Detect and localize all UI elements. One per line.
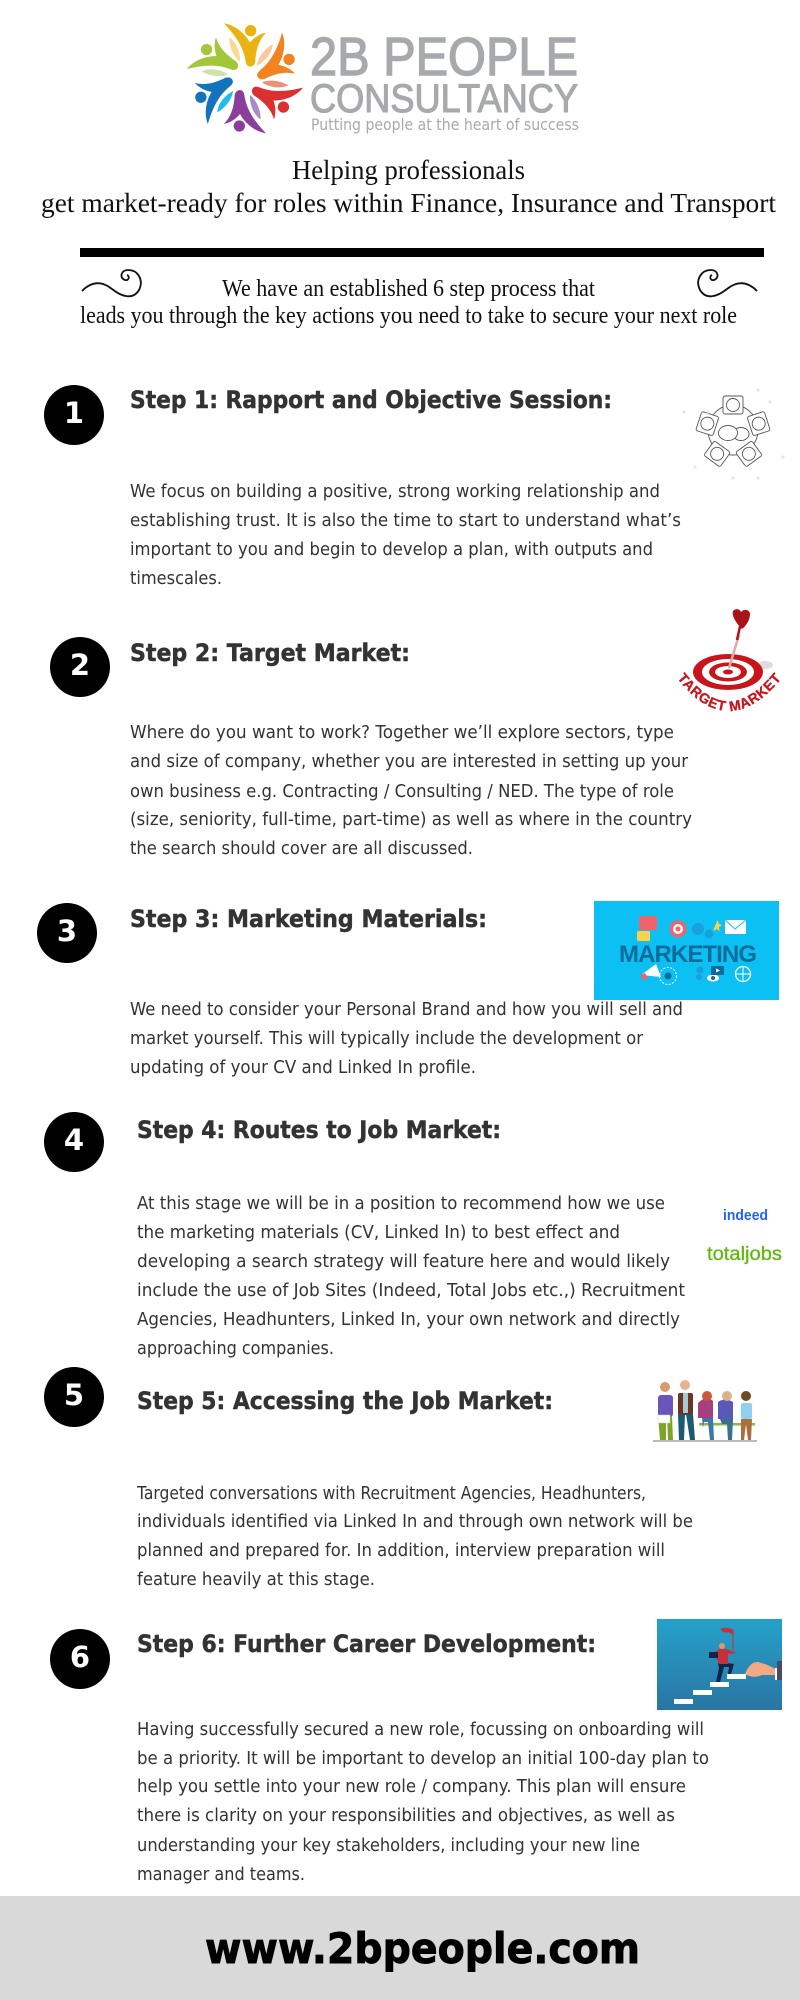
title: Helping professionals [292,155,525,185]
step 4 number [44,1112,104,1172]
icon: marketing banner: MARKETING [619,941,757,968]
icon: group of people [653,1380,757,1442]
step 3 panel [37,901,779,1078]
step 4 number: 4 [64,1123,84,1157]
step 6 number: 6 [70,1640,90,1674]
intro text [80,276,737,329]
step 5 number: 5 [64,1378,84,1412]
step 2 body: and size of company, whether you are interested in setting up your [130,752,689,772]
icon: climbing steps illustration [657,1619,782,1710]
step 2 panel [50,609,780,859]
step 4 body: At this stage we will be in a position to recommend how we use [137,1194,665,1214]
step 5 body: Targeted conversations with Recruitment Agencies, Headhunters, [136,1484,646,1504]
title [41,155,777,218]
step 5 panel [44,1367,757,1590]
step 2 number: 2 [70,648,90,682]
step 4 body: developing a search strategy will feature here and would likely [137,1252,670,1272]
step 6 heading: Step 6: Further Career Development: [137,1630,596,1658]
intro text: We have an established 6 step process that [222,276,595,302]
step 2 body: Where do you want to work? Together we’ll explore sectors, type [130,723,674,743]
step 1 body: establishing trust. It is also the time to start to understand what’s [130,511,681,531]
step 3 body: We need to consider your Personal Brand and how you will sell and [130,1000,683,1020]
step 1 body [130,482,681,589]
step 2 heading: Step 2: Target Market: [130,639,410,667]
step 5 body [136,1484,693,1590]
icon: round table meeting [682,388,784,480]
step 2 body: (size, seniority, full-time, part-time) as well as where in the country [130,810,692,830]
step 3 number [37,903,97,963]
logo wordmark: 2B PEOPLE [310,27,578,87]
step 6 body: manager and teams. [137,1865,305,1885]
logo [187,23,579,134]
step 6 body: help you settle into your new role / company. This plan will ensure [137,1777,686,1797]
step 6 body: understanding your key stakeholders, including your new line [137,1836,640,1856]
step 4 body: include the use of Job Sites (Indeed, Total Jobs etc.,) Recruitment [137,1281,685,1301]
icon: right swirl [698,270,757,296]
step 4 panel [44,1112,782,1359]
step 4 body [137,1194,685,1359]
step 1 body: important to you and begin to develop a plan, with outputs and [130,540,653,560]
step 5 heading: Step 5: Accessing the Job Market: [137,1387,553,1415]
intro text: leads you through the key actions you need to take to secure your next role [80,303,737,329]
step 3 body [130,1000,683,1078]
step 2 body: own business e.g. Contracting / Consulting / NED. The type of role [130,782,674,802]
icon: left swirl [82,270,141,296]
step 4 body: Agencies, Headhunters, Linked In, your own network and directly [137,1310,680,1330]
icon: target market dart [678,609,780,712]
step 2 number [50,637,110,697]
step 3 number: 3 [57,914,77,948]
step 1 body: timescales. [130,569,222,589]
logo tagline: Putting people at the heart of success [311,115,579,134]
step 6 number [50,1629,110,1689]
step 6 body: Having successfully secured a new role, focussing on onboarding will [137,1720,704,1740]
step 1 body: We focus on building a positive, strong working relationship and [130,482,660,502]
step 3 body: updating of your CV and Linked In profile. [130,1058,476,1078]
step 1 number: 1 [64,396,84,430]
logo: indeed: indeed [723,1207,768,1224]
step 3 heading: Step 3: Marketing Materials: [130,905,487,933]
icon: marketing banner [594,901,779,1000]
step 6 body: there is clarity on your responsibilities and objectives, as well as [137,1806,675,1826]
step 1 panel [44,385,784,589]
logo: totaljobs: totaljobs [707,1244,782,1265]
logo mark: six coloured figures [187,23,303,133]
step 5 body: individuals identified via Linked In and through own network will be [137,1512,693,1532]
step 6 panel [50,1619,782,1885]
divider bar [80,248,764,257]
step 5 body: feature heavily at this stage. [137,1570,375,1590]
step 6 body [137,1720,709,1885]
title: get market-ready for roles within Finance, Insurance and Transport [41,188,777,218]
footer band [0,1896,800,2000]
step 2 body: the search should cover are all discussed. [130,839,473,859]
step 4 heading: Step 4: Routes to Job Market: [137,1116,501,1144]
step 5 body: planned and prepared for. In addition, interview preparation will [137,1541,665,1561]
step 5 number [44,1367,104,1427]
step 4 body: approaching companies. [137,1339,334,1359]
icon: target market dart: TARGET MARKET [678,672,780,712]
step 6 body: be a priority. It will be important to develop an initial 100-day plan to [137,1749,709,1769]
step 2 body [130,723,692,859]
step 4 body: the marketing materials (CV, Linked In) to best effect and [137,1223,620,1243]
logo wordmark line two: CONSULTANCY [310,77,578,121]
step 1 heading: Step 1: Rapport and Objective Session: [130,386,612,414]
website address: www.2bpeople.com [205,1924,640,1973]
step 1 number [44,385,104,445]
step 3 body: market yourself. This will typically include the development or [130,1029,644,1049]
